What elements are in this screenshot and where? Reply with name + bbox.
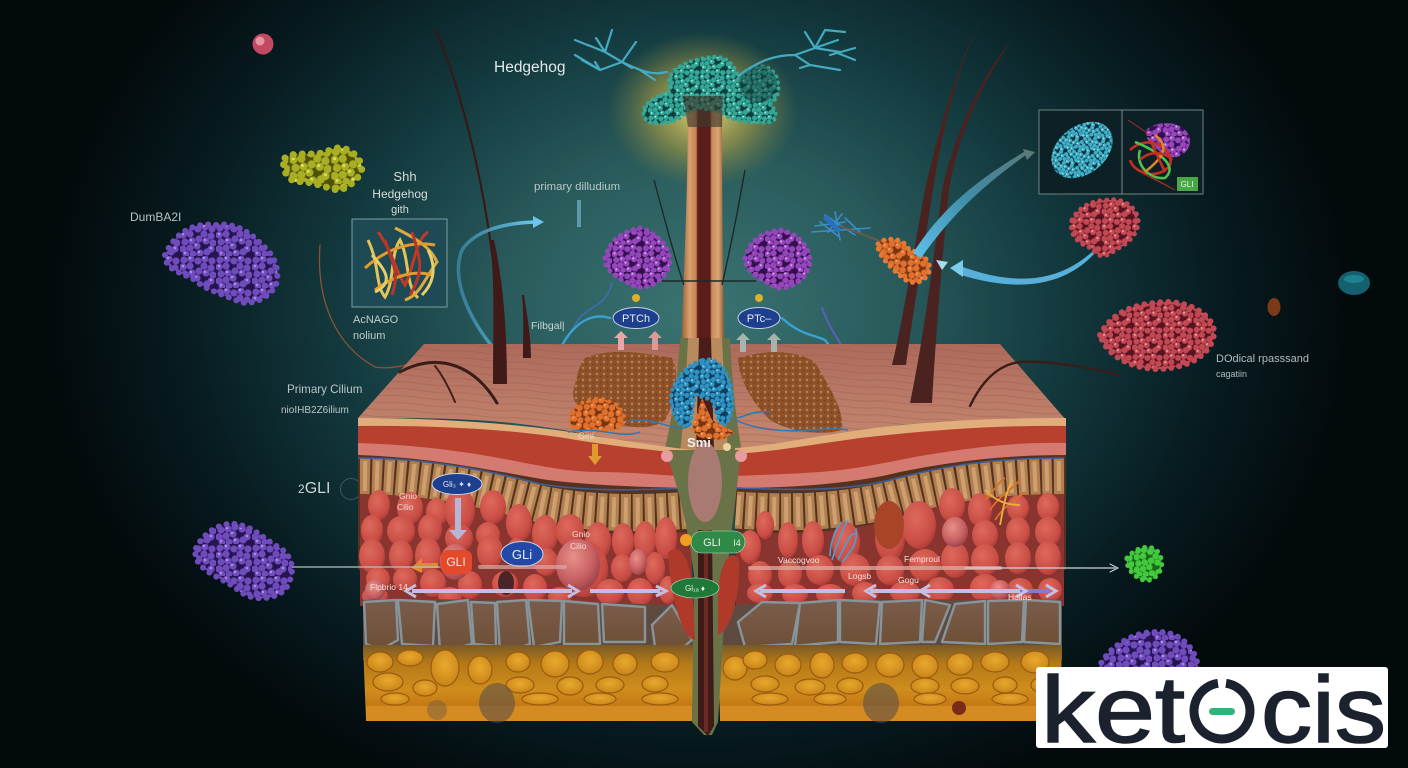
cell labels right: Femproul <box>904 554 940 564</box>
inset pair right <box>1039 110 1203 194</box>
cell labels right: Flpbrio 14 <box>370 582 408 592</box>
PTCh receptor right: PTc– <box>747 313 772 325</box>
label: Smi: Smi <box>687 435 711 450</box>
horizontal signal lines <box>285 564 1118 572</box>
dermis and front layers <box>358 418 1066 570</box>
decorative spheres <box>252 34 1370 316</box>
GLI red box: GLI <box>446 555 466 569</box>
PTCh receptor left <box>613 294 659 328</box>
thin hair arcs behind tissue <box>319 30 496 368</box>
label: crimson caption: DOdical rpasssand <box>1216 353 1309 365</box>
small blue fibre cell <box>830 520 856 562</box>
GLI red box <box>441 550 472 574</box>
orange down arrow <box>588 444 602 465</box>
arrow: blue left curve <box>458 216 544 350</box>
GLI green capsule: I4 <box>733 538 741 548</box>
label: Gnio Cilio: Cilio <box>397 502 414 512</box>
label: crimson caption <box>1216 353 1309 379</box>
cell labels right <box>370 554 1032 602</box>
molecule: yellow-green <box>284 148 362 190</box>
stone cell layer <box>363 599 1062 660</box>
cell labels right: Gogu <box>898 575 919 585</box>
GLI green oval: Gl₁ₐ ♦ <box>685 584 705 593</box>
inset pair right: GLI <box>1181 180 1193 189</box>
central stalk glow <box>608 32 798 188</box>
PTCh receptor left: PTCh <box>622 313 650 325</box>
double arrows <box>406 585 1056 597</box>
label: primary cilium left: nioIHB2Z6ilium <box>281 405 349 416</box>
label: Shh group: Hedgehog <box>372 187 428 201</box>
hairs over surface <box>400 10 1120 406</box>
inset: ribbon protein <box>352 219 447 307</box>
label: primary dilludium: primary dilludium <box>534 181 620 193</box>
molecule: green <box>1127 547 1162 580</box>
cell labels right: Hollas <box>1008 592 1032 602</box>
right molecule chain <box>812 212 885 243</box>
arrow: from red cluster <box>936 252 1094 285</box>
cell labels right: Vaccogvoo <box>778 555 820 565</box>
label: Gnio small centre: Gnio <box>572 529 590 539</box>
tissue top surface <box>358 344 1066 452</box>
tumour mass right <box>738 352 842 433</box>
cylinder layer <box>358 458 1064 512</box>
molecule: purple bottom right <box>1098 632 1198 670</box>
hedgehog protein cluster <box>643 57 778 127</box>
label: Filbgal: Filbgal| <box>531 320 565 332</box>
blue protein central <box>671 359 733 426</box>
tumour mass left <box>573 352 676 427</box>
GLI blue badge <box>501 542 543 566</box>
orange left arrow <box>411 558 438 573</box>
centre column <box>661 442 747 736</box>
arrow: up to inset <box>913 149 1035 258</box>
dendrite branches <box>575 30 855 80</box>
label: Gnio Cilio <box>397 491 417 512</box>
blue base fibres <box>568 412 848 434</box>
tick bar <box>577 200 581 227</box>
orange protein central <box>692 398 735 440</box>
label: Hedgehog: Hedgehog <box>494 59 566 76</box>
yellow fat layer <box>363 645 1062 723</box>
label: DumBA2I: DumBA2I <box>130 210 181 224</box>
orange protein left <box>570 399 624 432</box>
GLI green oval <box>671 578 719 598</box>
GLI green capsule <box>680 531 745 553</box>
logo: ket <box>1041 657 1185 762</box>
label: Shh group: Shh <box>393 169 417 184</box>
label: Gnio Cilio: Gnio <box>399 491 417 501</box>
GLI badge top <box>432 474 482 494</box>
GLI green capsule: GLI <box>703 537 721 549</box>
molecule: crimson upper <box>1071 200 1138 256</box>
flame fibres on right <box>985 478 1025 525</box>
PTCh receptor right <box>738 294 780 328</box>
GLI blue badge: GLi <box>512 547 532 562</box>
label: primary cilium left: Primary Cilium <box>287 383 362 396</box>
label: AcNAGO nolium <box>353 314 399 342</box>
label: Shh group <box>372 169 428 216</box>
label: Shh group: gith <box>391 204 409 216</box>
logo <box>1036 657 1388 762</box>
label: Gini: Gini <box>578 431 594 441</box>
GLI down arrow <box>449 498 467 540</box>
stalk base through surface <box>664 338 742 452</box>
thin lines across stalk <box>654 170 756 285</box>
molecule: purple lower left <box>195 524 292 598</box>
label: AcNAGO nolium: AcNAGO <box>353 314 399 326</box>
label: Gnio small centre <box>570 529 590 551</box>
orange protein right <box>878 239 929 283</box>
label: crimson caption: cagatiin <box>1216 369 1247 379</box>
molecule: large purple <box>165 224 277 303</box>
magenta protein left <box>605 228 670 287</box>
GLI badge top: Gli₃ ✦ ♦ <box>443 480 471 489</box>
cell labels right: Logsb <box>848 571 871 581</box>
stalk <box>682 100 724 340</box>
logo: cis <box>1261 657 1386 762</box>
label: AcNAGO nolium: nolium <box>353 330 385 342</box>
label: 2GLI <box>298 478 362 500</box>
label: 2GLI: 2GLI <box>298 480 330 497</box>
molecule: crimson large <box>1100 302 1214 369</box>
label: primary cilium left <box>281 383 362 416</box>
label: Gnio small centre: Cilio <box>570 541 587 551</box>
arrows: up to receptors <box>614 331 781 352</box>
magenta protein right <box>745 230 810 288</box>
red cells layer <box>359 488 1064 606</box>
blue fibres around receptors <box>542 283 870 425</box>
